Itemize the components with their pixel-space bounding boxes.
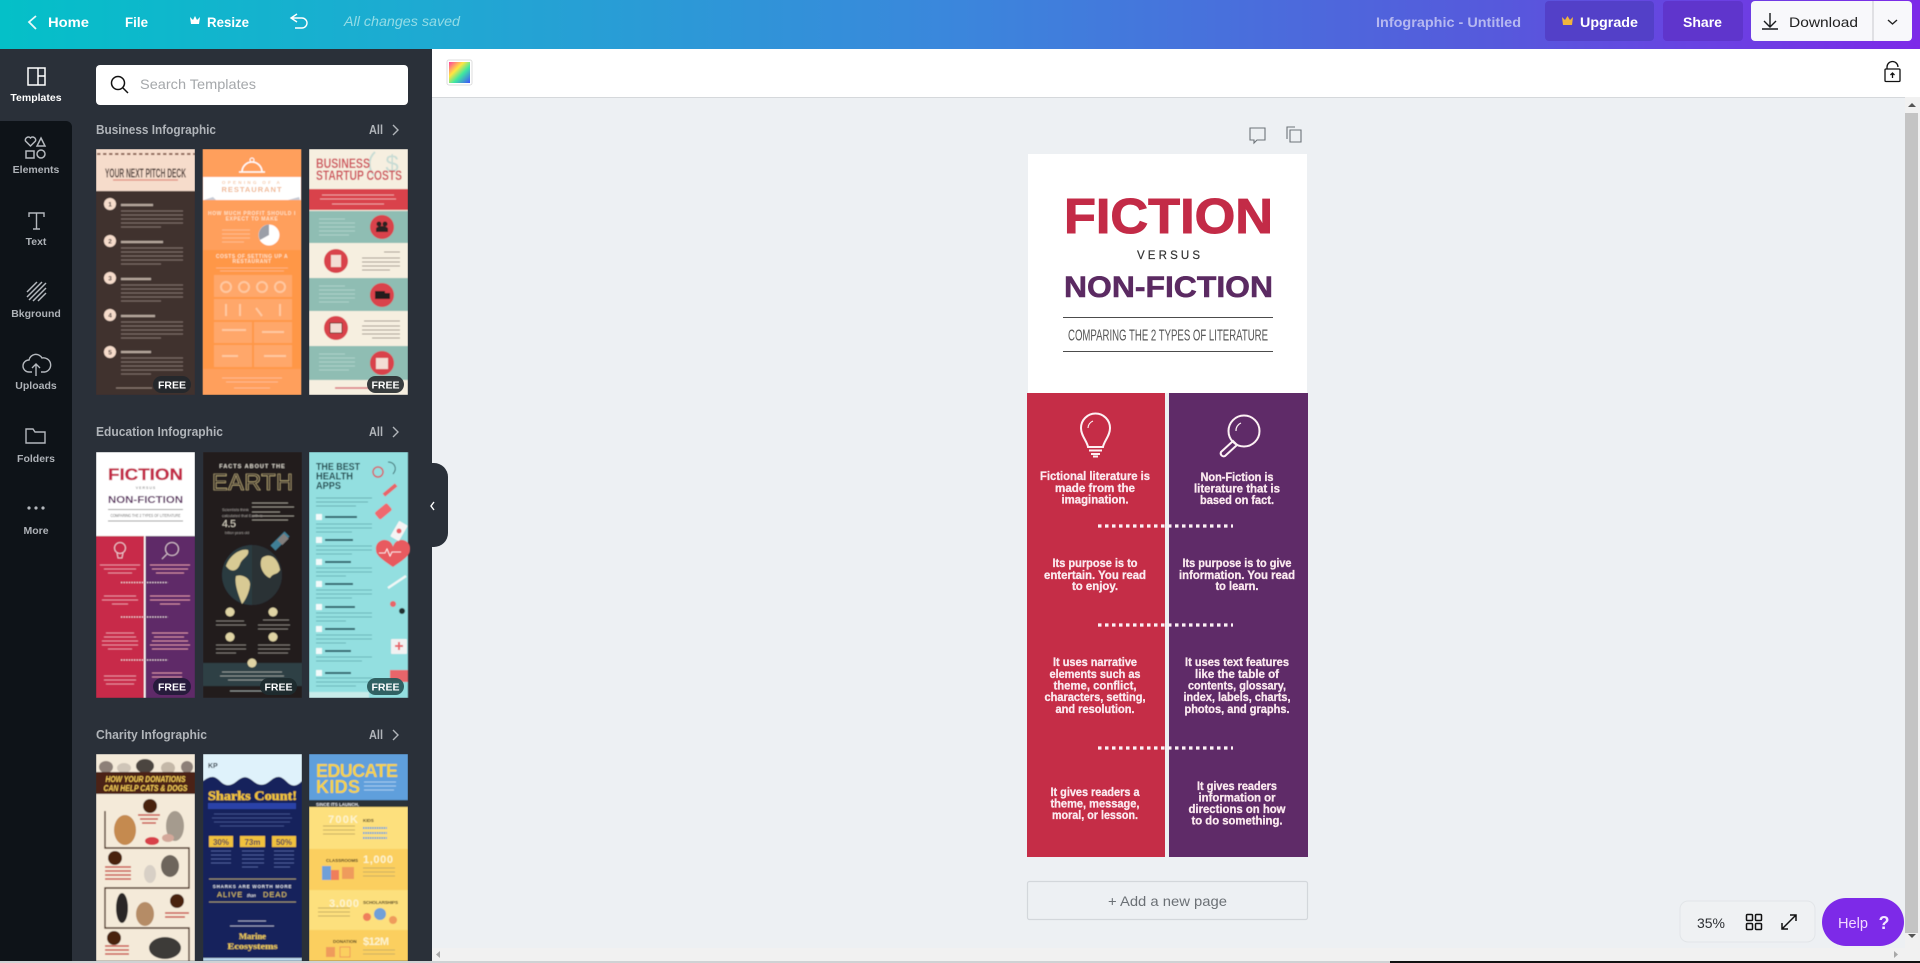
help button: Help bbox=[1838, 915, 1868, 932]
template: business startup costs bbox=[309, 149, 408, 395]
section heading: education bbox=[96, 424, 398, 439]
template: educate kids: 3,000 bbox=[329, 898, 359, 910]
template: educate kids: CLASSROOMS bbox=[326, 858, 358, 863]
template: business startup costs: STARTUP COSTS bbox=[316, 167, 402, 183]
icon: undo arrow bbox=[291, 14, 307, 28]
template: pitch deck: 1 bbox=[108, 202, 112, 208]
template: educate kids: EDUCATE bbox=[316, 761, 398, 781]
icon: grid view bbox=[1746, 914, 1762, 930]
icon: duplicate page bbox=[1287, 127, 1301, 142]
non-fiction text 2: Its purpose is to give bbox=[1182, 556, 1292, 570]
fiction text 3: It uses narrative bbox=[1053, 655, 1137, 669]
top navigation bar bbox=[0, 0, 1920, 49]
non-fiction text 2 bbox=[1179, 556, 1295, 593]
template: fiction versus non-fiction thumbnail: COMPARING THE 2 TYPES OF LITERATURE bbox=[110, 513, 180, 518]
non-fiction text 1: literature that is bbox=[1194, 482, 1280, 496]
non-fiction text 3: index, labels, charts, bbox=[1184, 690, 1290, 704]
template: educate kids bbox=[309, 754, 408, 961]
non-fiction text 4: It gives readers bbox=[1197, 779, 1277, 793]
fiction text 4 bbox=[1050, 785, 1140, 822]
template: educate kids: SINCE ITS LAUNCH, bbox=[316, 802, 359, 807]
template: facts about the earth: billion years old bbox=[225, 531, 249, 535]
fiction text 4: theme, message, bbox=[1050, 796, 1140, 810]
zoom controls: 35% bbox=[1697, 915, 1725, 931]
non-fiction text 4: directions on how bbox=[1188, 802, 1286, 816]
tab: uploads bbox=[15, 354, 57, 392]
section heading: charity: Charity Infographic bbox=[96, 727, 207, 742]
panel collapse tab bbox=[431, 463, 448, 547]
fiction text 1: made from the bbox=[1055, 481, 1135, 495]
template: educate kids: DONATION bbox=[333, 939, 357, 944]
fiction text 2: entertain. You read bbox=[1044, 568, 1146, 582]
subtitle: versus: VERSUS bbox=[1137, 250, 1200, 262]
free badge: FREE bbox=[371, 380, 400, 392]
template: fiction versus non-fiction thumbnail: NON-FICTION bbox=[108, 495, 183, 506]
template: sharks count: KP bbox=[208, 763, 218, 770]
tab: background: Bkground bbox=[11, 308, 61, 320]
fiction text 3: elements such as bbox=[1050, 667, 1141, 681]
editor toolbar bbox=[432, 49, 1920, 98]
icon: back chevron bbox=[29, 16, 36, 29]
download button: Download bbox=[1789, 14, 1858, 30]
template: sharks count: Sharks Count! bbox=[208, 788, 297, 803]
free badge bbox=[153, 376, 191, 393]
share button: Share bbox=[1683, 14, 1722, 30]
template: best health apps bbox=[309, 452, 410, 698]
section heading: charity bbox=[96, 727, 398, 742]
template: fiction versus non-fiction thumbnail bbox=[96, 452, 195, 698]
free badge bbox=[367, 376, 404, 393]
template: educate kids: 700K bbox=[328, 814, 358, 826]
template: pitch deck: 5 bbox=[108, 350, 112, 356]
icon: fullscreen bbox=[1782, 915, 1796, 929]
fiction text 1: Fictional literature is bbox=[1040, 469, 1150, 483]
icon: search bbox=[112, 76, 128, 93]
template: educate kids: KIDS bbox=[316, 777, 360, 797]
rule lines bbox=[1063, 318, 1273, 352]
template: sharks count: DEAD bbox=[263, 890, 288, 899]
template: facts about the earth: calculated that Earth is bbox=[222, 513, 262, 518]
template: business startup costs: BUSINESS bbox=[316, 155, 370, 171]
title: fiction: FICTION bbox=[1064, 190, 1273, 244]
non-fiction text 3: contents, glossary, bbox=[1188, 678, 1286, 692]
free badge bbox=[367, 678, 404, 695]
non-fiction text 1: based on fact. bbox=[1200, 493, 1274, 507]
section heading: education: All bbox=[369, 424, 383, 439]
template: restaurant: OPENING OF A bbox=[222, 180, 282, 185]
home link: Home bbox=[48, 14, 89, 30]
template: educate kids: SCHOLARSHIPS bbox=[363, 900, 398, 905]
template: sharks count: Ecosystems bbox=[228, 941, 278, 951]
section heading: charity: All bbox=[369, 727, 383, 742]
non-fiction text 1: Non-Fiction is bbox=[1200, 470, 1274, 484]
template: sharks count: ALIVE bbox=[217, 890, 243, 899]
infographic page bbox=[1027, 154, 1308, 857]
section heading: education: Education Infographic bbox=[96, 424, 223, 439]
non-fiction text 4 bbox=[1188, 779, 1286, 828]
section heading: business: Business Infographic bbox=[96, 122, 216, 137]
template: facts about the earth: Scientists think bbox=[222, 507, 249, 512]
template: sharks count: SHARKS ARE WORTH MORE bbox=[213, 884, 292, 889]
fiction text 3 bbox=[1044, 655, 1146, 716]
non-fiction text 1 bbox=[1194, 470, 1280, 507]
fiction text 1 bbox=[1040, 469, 1150, 506]
template: facts about the earth bbox=[203, 452, 302, 698]
tab: templates bbox=[10, 68, 62, 104]
free badge bbox=[153, 678, 191, 695]
download button bbox=[1751, 1, 1912, 41]
panel: fiction column bbox=[1027, 393, 1165, 857]
fiction text 3: characters, setting, bbox=[1044, 690, 1146, 704]
template: restaurant: EXPECT TO MAKE bbox=[226, 216, 278, 222]
template: restaurant bbox=[202, 149, 302, 395]
template: pitch deck: 2 bbox=[108, 238, 112, 246]
non-fiction text 3 bbox=[1184, 655, 1290, 716]
help button: ? bbox=[1878, 913, 1890, 933]
free badge: FREE bbox=[158, 380, 186, 392]
free badge bbox=[260, 678, 297, 695]
fiction text 2: Its purpose is to bbox=[1052, 556, 1138, 570]
template: fiction versus non-fiction thumbnail: FICTION bbox=[108, 466, 183, 484]
help button bbox=[1822, 898, 1904, 946]
canvas background bbox=[432, 97, 1920, 963]
add page button: + Add a new page bbox=[1108, 893, 1227, 909]
template: cats and dogs donations bbox=[96, 754, 195, 961]
left tool rail bbox=[0, 49, 432, 963]
search box: Search Templates bbox=[140, 76, 256, 92]
icon: lock bbox=[1885, 62, 1900, 82]
template: pitch deck bbox=[96, 149, 195, 395]
zoom controls bbox=[1680, 901, 1815, 942]
non-fiction text 2: information. You read bbox=[1179, 568, 1295, 582]
free badge: FREE bbox=[264, 682, 293, 694]
color swatch bbox=[447, 60, 472, 85]
fiction text 2 bbox=[1044, 556, 1146, 593]
icon: resize crown bbox=[190, 16, 200, 24]
free badge: FREE bbox=[371, 682, 400, 694]
fiction text 2: to enjoy. bbox=[1072, 579, 1118, 593]
icon: lightbulb bbox=[1081, 414, 1110, 456]
icon: comment bbox=[1250, 128, 1265, 143]
template: educate kids: 1,000 bbox=[363, 854, 393, 866]
tab: background bbox=[11, 282, 61, 320]
tagline: COMPARING THE 2 TYPES OF LITERATURE bbox=[1068, 328, 1268, 344]
non-fiction text 3: like the table of bbox=[1195, 667, 1280, 681]
search box bbox=[96, 65, 408, 105]
template: educate kids: $12M bbox=[363, 936, 389, 948]
fiction text 3: theme, conflict, bbox=[1054, 678, 1136, 692]
title: non-fiction: NON-FICTION bbox=[1064, 271, 1273, 304]
template: educate kids: KIDS bbox=[363, 818, 374, 823]
fiction text 4: It gives readers a bbox=[1050, 785, 1140, 799]
template: pitch deck: 3 bbox=[108, 276, 112, 282]
panel: non-fiction column bbox=[1169, 393, 1308, 857]
tab: folders: Folders bbox=[17, 453, 55, 465]
resize menu: Resize bbox=[207, 14, 249, 30]
upgrade button bbox=[1545, 1, 1654, 41]
left tool rail: Elements bbox=[13, 164, 60, 176]
non-fiction text 3: photos, and graphs. bbox=[1184, 702, 1290, 716]
non-fiction text 4: information or bbox=[1198, 790, 1276, 804]
upgrade button: Upgrade bbox=[1580, 14, 1638, 30]
template: restaurant: RESTAURANT bbox=[221, 185, 283, 194]
add page button bbox=[1028, 882, 1308, 920]
non-fiction text 4: to do something. bbox=[1192, 814, 1282, 828]
template: sharks count: 73m bbox=[244, 838, 261, 847]
template: best health apps: HEALTH bbox=[316, 470, 353, 482]
template: pitch deck: 4 bbox=[108, 312, 112, 320]
fiction text 3: and resolution. bbox=[1056, 702, 1134, 716]
fiction text 4: moral, or lesson. bbox=[1052, 808, 1138, 822]
panel: white header bbox=[1028, 154, 1307, 393]
tab: uploads: Uploads bbox=[15, 380, 57, 392]
save status: All changes saved bbox=[343, 14, 461, 29]
template: facts about the earth: 4.5 bbox=[222, 518, 236, 530]
template: business startup costs: $ bbox=[385, 151, 399, 178]
tab: more: More bbox=[23, 525, 49, 537]
template: best health apps: THE BEST bbox=[316, 461, 360, 473]
fiction text 1: imagination. bbox=[1062, 492, 1128, 506]
template: restaurant: HOW MUCH PROFIT SHOULD I bbox=[208, 211, 296, 217]
template: cats and dogs donations: CAN HELP CATS & DOGS bbox=[104, 784, 188, 793]
tab: folders bbox=[17, 429, 55, 465]
template: sharks count: 50% bbox=[276, 838, 292, 847]
non-fiction text 3: It uses text features bbox=[1185, 655, 1289, 669]
tab: more bbox=[23, 506, 49, 537]
section heading: business: All bbox=[369, 122, 383, 137]
icon: magnifying glass bbox=[1221, 416, 1260, 456]
template: restaurant: RESTAURANT bbox=[232, 259, 272, 265]
template: sharks count: Marine bbox=[239, 931, 266, 941]
template: restaurant: COSTS OF SETTING UP A bbox=[216, 254, 288, 260]
template: cats and dogs donations: HOW YOUR DONATIONS bbox=[106, 775, 186, 784]
document title: Infographic - Untitled bbox=[1376, 14, 1521, 30]
template: facts about the earth: EARTH bbox=[212, 469, 293, 495]
template: sharks count bbox=[203, 754, 302, 961]
dotted dividers bbox=[1098, 526, 1233, 748]
icon: collapse chevron bbox=[431, 502, 434, 510]
tab: elements bbox=[25, 137, 45, 158]
tab: text bbox=[26, 213, 47, 248]
template: sharks count: 30% bbox=[213, 838, 229, 847]
file menu: File bbox=[125, 14, 148, 30]
free badge: FREE bbox=[158, 682, 186, 694]
section heading: business bbox=[96, 122, 398, 137]
template: sharks count: than bbox=[247, 893, 256, 898]
template: best health apps: APPS bbox=[316, 480, 341, 492]
non-fiction text 2: to learn. bbox=[1216, 579, 1258, 593]
share button bbox=[1663, 1, 1743, 41]
template: facts about the earth: FACTS ABOUT THE bbox=[219, 464, 286, 470]
tab: text: Text bbox=[26, 236, 47, 248]
tab: templates: Templates bbox=[10, 92, 62, 104]
template: pitch deck: YOUR NEXT PITCH DECK bbox=[105, 166, 186, 180]
template: fiction versus non-fiction thumbnail: VERSUS bbox=[136, 486, 156, 490]
